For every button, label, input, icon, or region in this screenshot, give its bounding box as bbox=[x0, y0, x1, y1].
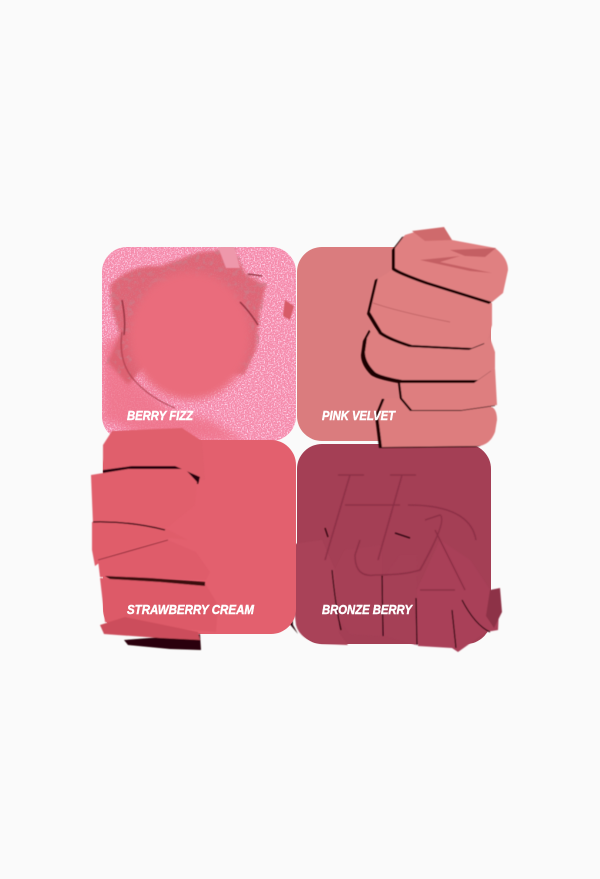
slab stack bbox=[361, 227, 508, 448]
swatch: Pink Velvet bbox=[297, 227, 508, 448]
torn pieces bbox=[285, 528, 502, 652]
swatch palette infographic bbox=[90, 226, 508, 653]
torn slabs bbox=[91, 428, 218, 650]
swatch: Berry Fizz bbox=[102, 246, 296, 441]
label: Berry Fizz: BERRY FIZZ bbox=[127, 408, 194, 423]
embossed monogram bbox=[325, 475, 476, 590]
swatch: Bronze Berry bbox=[285, 444, 502, 652]
label: Strawberry Cream: STRAWBERRY CREAM bbox=[127, 602, 255, 617]
label: Bronze Berry: BRONZE BERRY bbox=[322, 602, 413, 617]
swatch: Strawberry Cream bbox=[91, 428, 296, 650]
label: Pink Velvet: PINK VELVET bbox=[322, 408, 396, 423]
